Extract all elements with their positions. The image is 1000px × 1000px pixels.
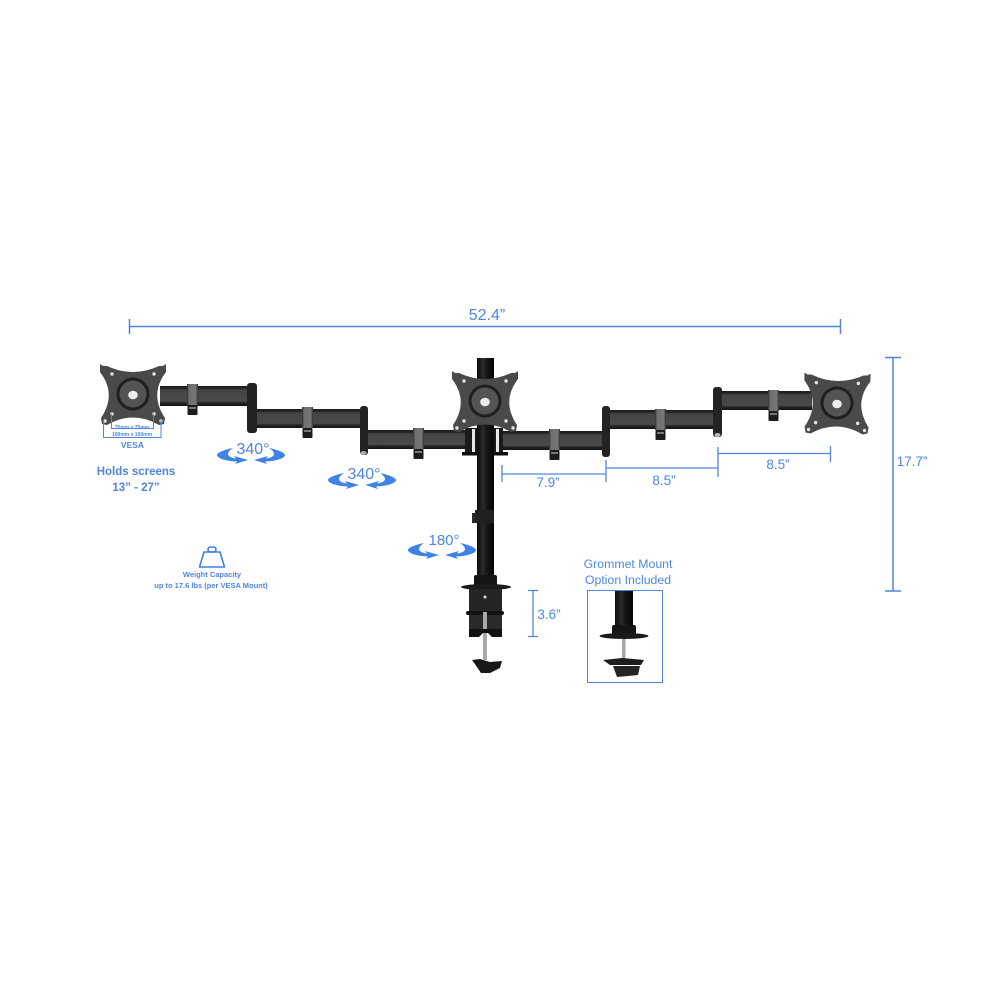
grommet mount heading: Grommet Mount (584, 557, 673, 571)
VESA brackets and label: 100mm x 100mm (112, 432, 153, 438)
VESA brackets and label (104, 414, 161, 450)
dimension: overall height 17.7: 17.7” (897, 454, 927, 469)
rotation 180 (408, 532, 476, 559)
desk clamp (461, 575, 511, 673)
center VESA plate (452, 371, 518, 432)
rotation 340 second (328, 466, 396, 489)
weight capacity text: Weight Capacity (183, 570, 242, 579)
icon: weight (200, 547, 224, 567)
dimension: overall width 52.4: 52.4” (469, 307, 505, 324)
grommet mount heading: Option Included (585, 573, 671, 587)
left arm assembly (160, 383, 466, 459)
VESA brackets and label: 75mm x 75mm (115, 425, 150, 431)
rotation 180: 180° (428, 532, 460, 549)
holds screens text: 13” - 27” (112, 482, 160, 494)
dimension: 8.5 upper: 8.5” (766, 457, 790, 472)
grommet mount heading (584, 557, 673, 587)
grommet mount panel (588, 590, 662, 682)
VESA brackets and label: VESA (121, 440, 144, 450)
dimension: 8.5 lower (606, 447, 718, 488)
rotation 340 first (217, 441, 285, 464)
weight capacity text: up to 17.6 lbs (per VESA Mount) (154, 581, 268, 590)
left VESA plate (100, 364, 166, 425)
dimension: 3.6: 3.6” (537, 607, 561, 622)
dimension: 8.5 upper (718, 446, 830, 472)
right arm assembly (503, 387, 812, 460)
dimension: 3.6 (528, 590, 561, 637)
dimension: 8.5 lower: 8.5” (652, 473, 676, 488)
center hub and pole (462, 425, 508, 575)
center pole upper (477, 358, 494, 428)
holds screens text (97, 466, 175, 494)
rotation 340 second: 340° (347, 466, 381, 483)
dimension: overall width 52.4 (129, 307, 841, 334)
right VESA plate (803, 372, 871, 435)
dimension: 7.9 (502, 460, 606, 490)
dimension: overall height 17.7 (885, 357, 927, 591)
rotation 340 first: 340° (236, 441, 270, 458)
weight capacity text (154, 570, 268, 590)
holds screens text: Holds screens (97, 466, 175, 478)
dimension: 7.9: 7.9” (536, 475, 560, 490)
